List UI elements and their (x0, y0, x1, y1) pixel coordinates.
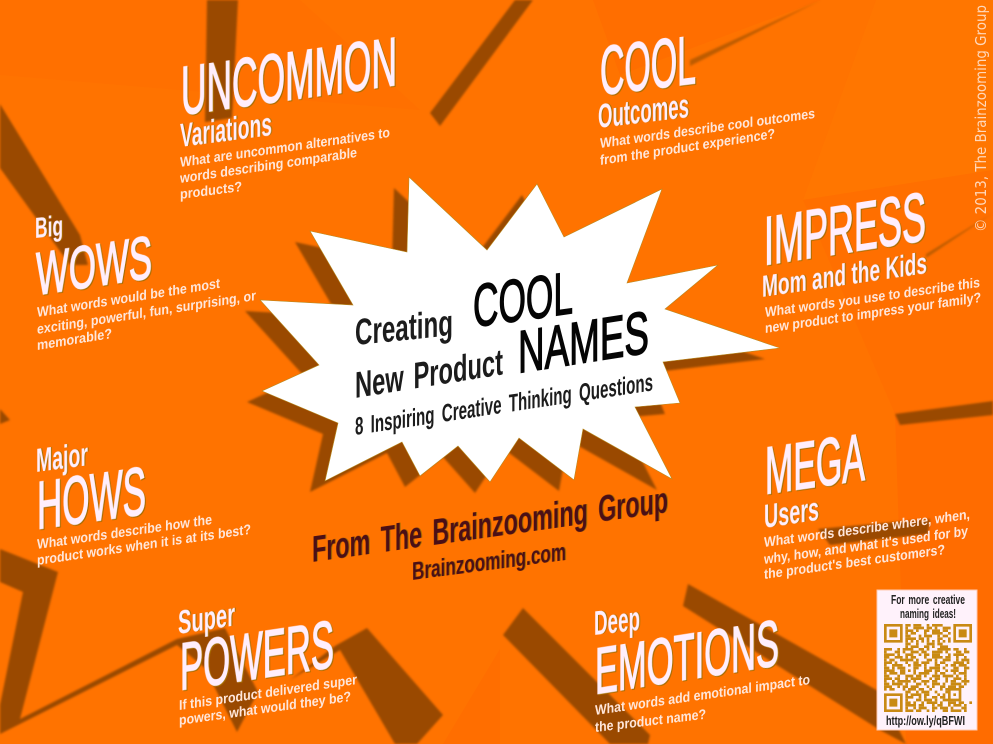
title line: Creating COOL: Creating (355, 301, 453, 353)
block: Deep Emotions (594, 600, 810, 735)
block: Cool Outcomes: What words describe cool outcomes (600, 105, 815, 151)
subtitle: 8 Inspiring Creative Thinking Questions (355, 368, 653, 441)
block: Mega Users: What words describe where, when, (764, 506, 970, 550)
QR card heading (891, 592, 965, 621)
QR code (884, 624, 972, 712)
central starburst (260, 177, 780, 482)
block: Cool Outcomes: COOL (600, 20, 696, 110)
block: Major Hows: product works when it is at its best? (37, 521, 251, 568)
block: Big Wows: WOWS (36, 223, 152, 308)
block: Super Powers: Super (178, 597, 235, 642)
block: Mega Users (763, 420, 970, 582)
block: Big Wows: Big (35, 210, 63, 245)
block: Uncommon Variations (179, 22, 397, 202)
block: Major Hows: What words describe how the (37, 511, 212, 552)
title line: Creating COOL (355, 258, 573, 353)
title line: New Product NAMES: New Product (355, 341, 503, 406)
title line: Creating COOL: COOL (473, 258, 573, 340)
block: Big Wows: exciting, powerful, fun, surprising, or (37, 287, 256, 337)
block: Mega Users: Users (764, 491, 819, 536)
block: Super Powers: powers, what would they be? (179, 688, 351, 728)
block: Super Powers: POWERS (180, 607, 334, 705)
block: Uncommon Variations: products? (180, 178, 242, 202)
block: From The Brainzooming Group: From The Brainzooming Group (312, 478, 668, 570)
block: Uncommon Variations: What are uncommon alternatives to (180, 124, 390, 170)
block: Big Wows: What words would be the most (37, 275, 220, 320)
starburst shadow (245, 188, 765, 493)
block: Cool Outcomes (598, 20, 815, 168)
block: Big Wows (35, 210, 256, 353)
block: Mega Users: the product's best customers? (764, 541, 945, 582)
QR code card (877, 590, 977, 730)
block: Impress Mom and the Kids (762, 177, 981, 336)
block: Uncommon Variations: Variations (180, 106, 272, 155)
block: Super Powers: If this product delivered super (179, 671, 357, 713)
block: Super Powers (178, 597, 357, 728)
block: From The Brainzooming Group: Brainzooming.com (412, 538, 566, 586)
block: Deep Emotions: EMOTIONS (595, 606, 779, 708)
block: Mega Users: MEGA (765, 420, 865, 509)
block: From The Brainzooming Group (312, 478, 668, 586)
block: Big Wows: memorable? (37, 325, 112, 353)
block: Mega Users: why, how, and what it's used for by (763, 522, 968, 567)
QR card heading: naming ideas! (900, 606, 956, 621)
block: Deep Emotions: Deep (594, 600, 640, 643)
block: Uncommon Variations: words describing comparable (179, 144, 357, 186)
block: Cool Outcomes: Outcomes (598, 87, 689, 136)
block: Major Hows: Major (36, 436, 88, 480)
title line: New Product NAMES: NAMES (518, 298, 649, 386)
block: Major Hows: HOWS (37, 453, 146, 544)
block: Deep Emotions: the product name? (595, 706, 706, 735)
title line: New Product NAMES (355, 298, 649, 406)
block: Deep Emotions: What words add emotional impact to (595, 671, 810, 718)
block: Cool Outcomes: from the product experience? (600, 125, 775, 168)
